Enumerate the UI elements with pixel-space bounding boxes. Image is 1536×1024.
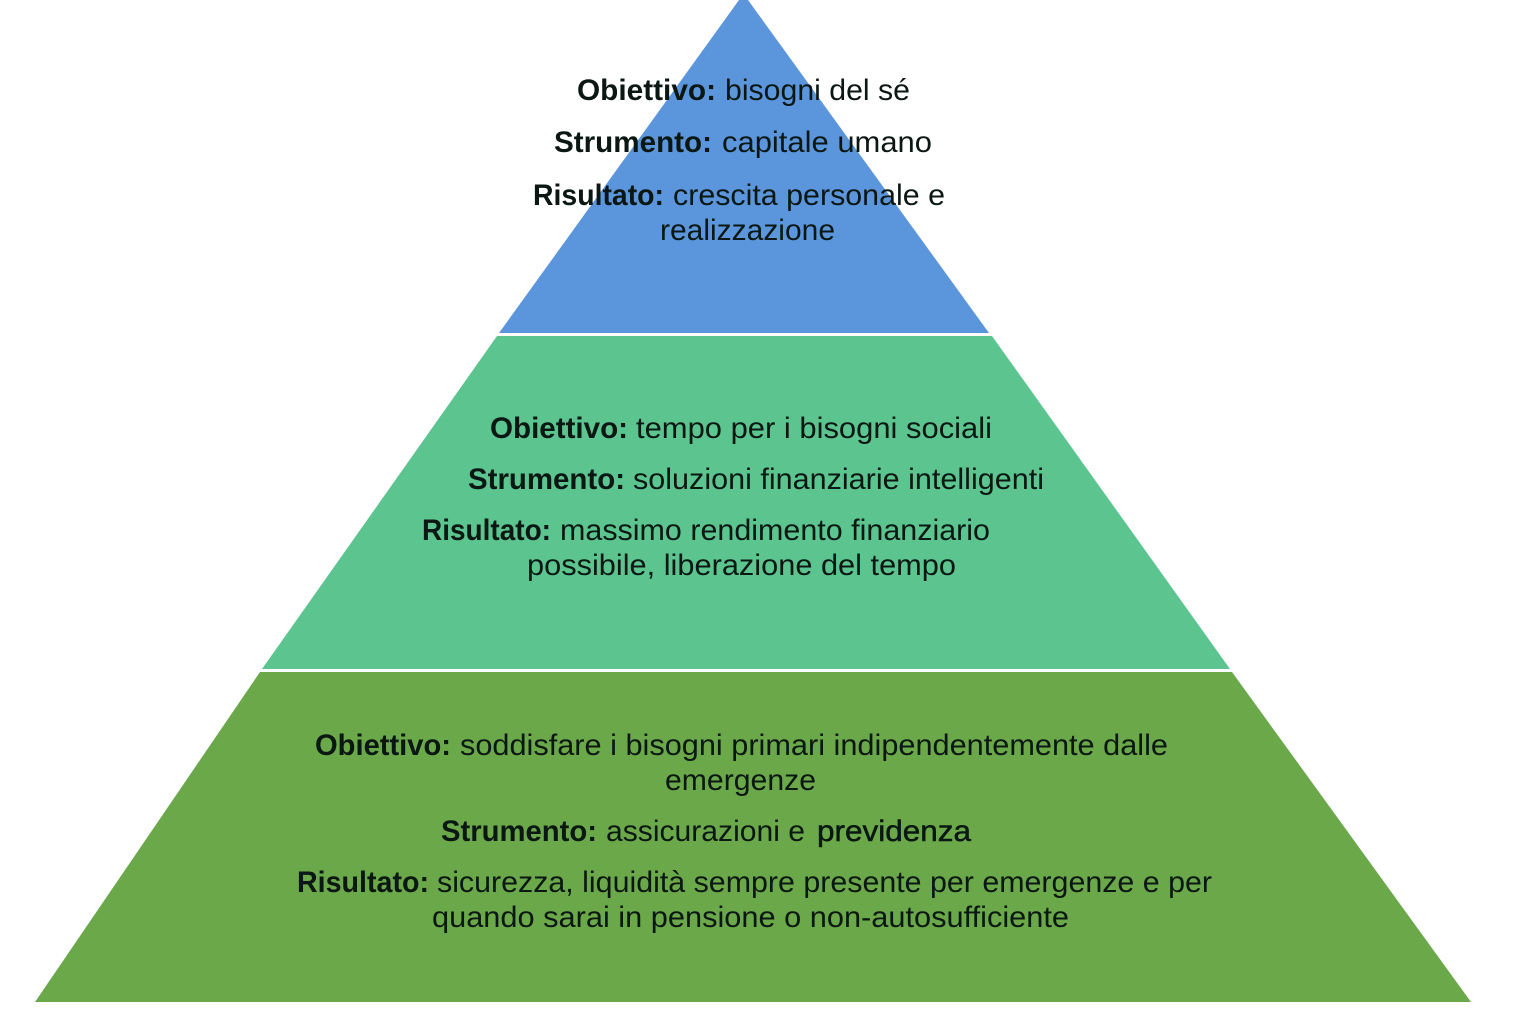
text: Risultato top: realizzazione — [660, 214, 835, 247]
teal-green trapezoid — [262, 336, 1230, 669]
text: Obiettivo top: bisogni del sé — [725, 74, 910, 107]
text: Obiettivo top: Obiettivo: — [577, 74, 716, 107]
text: Strumento bottom: previdenza — [817, 815, 971, 848]
text: Strumento middle: soluzioni finanziarie intelligenti — [633, 463, 1044, 496]
text: Obiettivo bottom: soddisfare i bisogni primari indipendentemente dalle — [460, 729, 1168, 762]
blue triangle — [499, 0, 989, 333]
text: Risultato middle: Risultato: — [422, 514, 551, 547]
text: Strumento top: capitale umano — [722, 126, 932, 159]
text: Risultato top: Risultato: — [533, 179, 664, 212]
text: Obiettivo middle: Obiettivo: — [490, 412, 628, 445]
text: Obiettivo bottom: Obiettivo: — [315, 729, 451, 762]
text: Strumento bottom — [441, 815, 971, 848]
text: Obiettivo top — [577, 74, 910, 107]
text: Risultato bottom: Risultato: — [297, 866, 429, 899]
text: Risultato top — [533, 179, 945, 247]
panel: middle tier, social needs — [262, 336, 1230, 669]
text: Strumento bottom: assicurazioni e — [606, 815, 805, 848]
text: Strumento bottom: Strumento: — [441, 815, 597, 848]
panel: bottom tier, primary needs — [35, 672, 1471, 1002]
text: Strumento top — [554, 126, 932, 159]
text: Risultato middle — [422, 514, 990, 582]
text: Risultato middle: massimo rendimento finanziario — [560, 514, 990, 547]
text: Strumento top: Strumento: — [554, 126, 712, 159]
text: Risultato middle: possibile, liberazione del tempo — [527, 549, 956, 582]
green trapezoid — [35, 672, 1471, 1002]
text: Obiettivo bottom: emergenze — [665, 764, 816, 797]
text: Risultato bottom: sicurezza, liquidità sempre presente per emergenze e per — [437, 866, 1212, 899]
text: Strumento middle: Strumento: — [468, 463, 625, 496]
text: Risultato bottom — [297, 866, 1212, 934]
panel: top tier, self needs — [499, 0, 989, 333]
text: Obiettivo middle: tempo per i bisogni sociali — [636, 412, 992, 445]
text: Risultato bottom: quando sarai in pensione o non-autosufficiente — [432, 901, 1069, 934]
text: Obiettivo middle — [490, 412, 992, 445]
text: Obiettivo bottom — [315, 729, 1168, 797]
text: Risultato top: crescita personale e — [673, 179, 945, 212]
